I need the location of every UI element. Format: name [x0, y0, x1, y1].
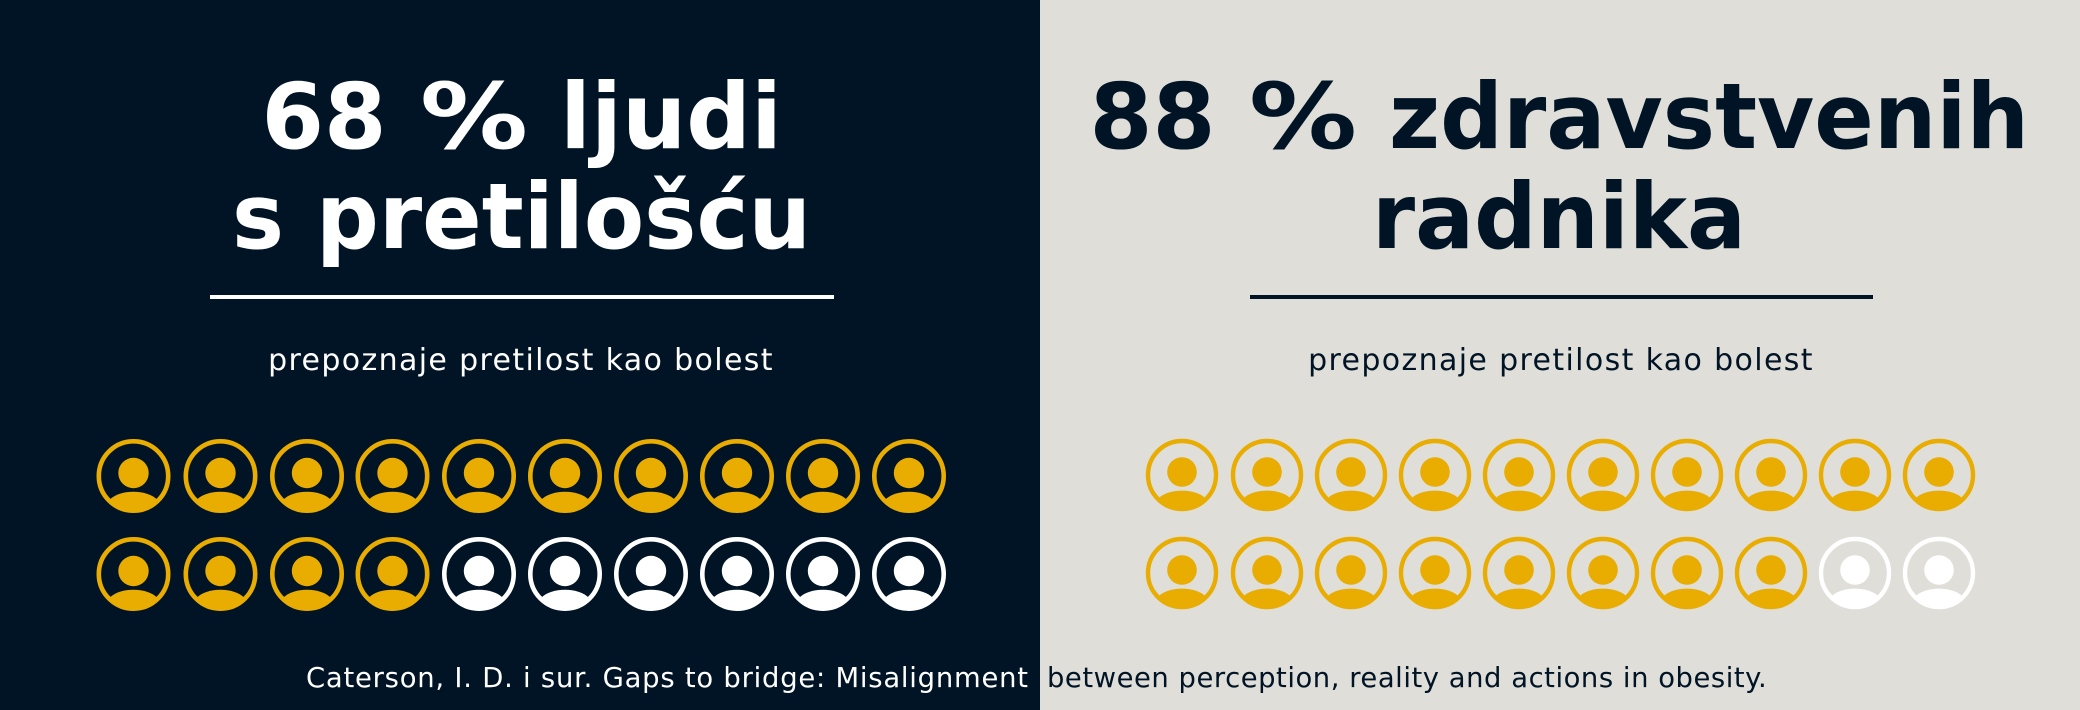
source citation: [306, 663, 1767, 694]
heading: right: 88: [1090, 65, 1216, 170]
heading: left: ljudi: [560, 65, 782, 170]
heading: right: %: [1249, 65, 1357, 170]
heading: left: 68: [262, 65, 386, 170]
panel: left background: [0, 0, 1040, 710]
icon grid: right, 88% of health workers: [1148, 441, 1973, 607]
heading: right: [1090, 65, 2029, 270]
source citation: Caterson, I. D. i sur. Gaps to bridge: Misalignment: [306, 663, 1029, 694]
heading: right: zdravstvenih: [1389, 65, 2029, 170]
divider: left: [210, 295, 834, 299]
panel: right background: [1040, 0, 2080, 710]
source citation: between perception, reality and actions in obesity.: [1047, 663, 1767, 694]
divider: right: [1250, 295, 1873, 299]
heading: left: %: [420, 65, 528, 170]
heading: left: [232, 65, 811, 270]
subheading: left: prepoznaje pretilost kao bolest: [268, 343, 774, 378]
icon grid: left, 68% of people: [99, 441, 944, 609]
heading: left: pretilošću: [316, 165, 811, 270]
subheading: right: prepoznaje pretilost kao bolest: [1308, 343, 1814, 378]
heading: right: radnika: [1372, 165, 1746, 270]
heading: left: s: [232, 165, 284, 270]
